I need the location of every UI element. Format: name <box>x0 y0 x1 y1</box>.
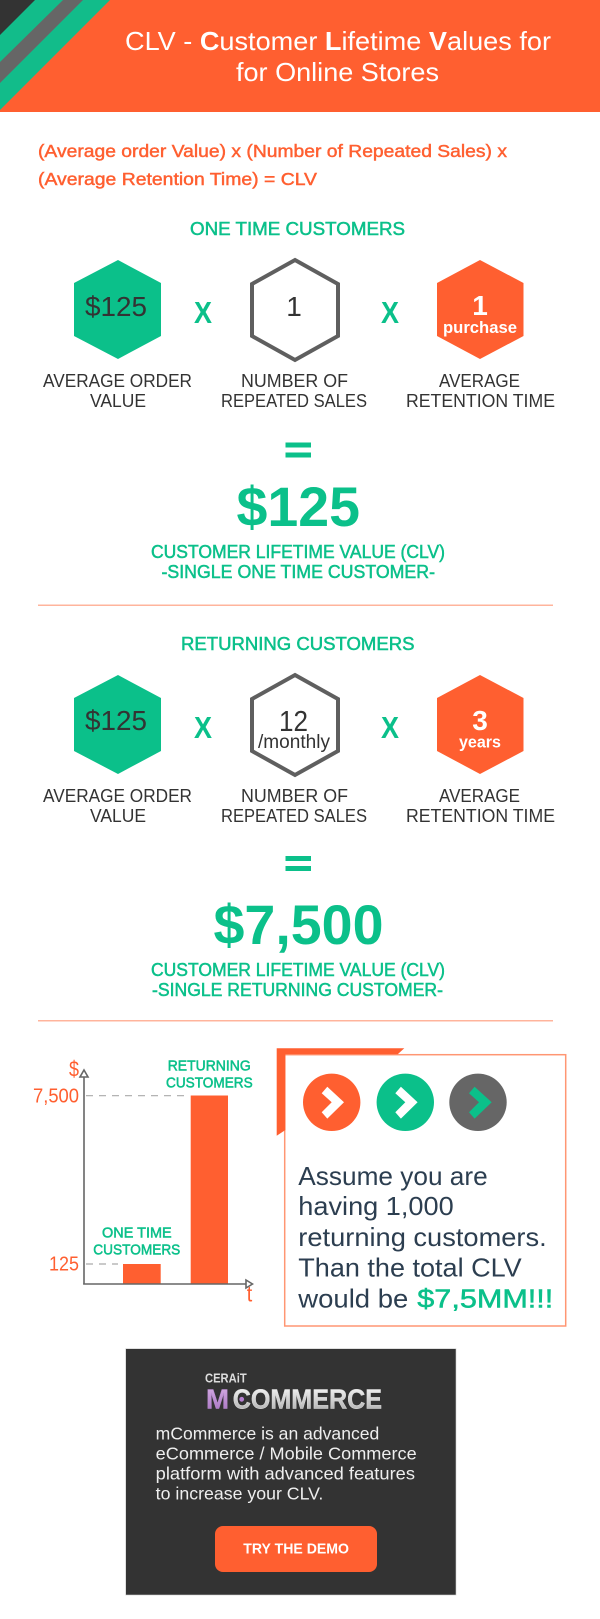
label: number of repeated sales: NUMBER OF <box>241 371 348 391</box>
hexagon: number of repeated sales: 1 <box>286 291 302 322</box>
logo: cerait mcommerce: COMMERCE <box>233 1383 382 1414</box>
callout text: returning customers. <box>298 1222 547 1252</box>
label: average order value <box>43 371 192 411</box>
label: average order value: AVERAGE ORDER <box>43 786 192 806</box>
multiply sign: X <box>194 710 212 745</box>
promo text <box>156 1423 417 1503</box>
promo text: to increase your CLV. <box>156 1483 323 1503</box>
callout text: having 1,000 <box>298 1191 454 1221</box>
button: try the demo: TRY THE DEMO <box>243 1540 349 1557</box>
label: average retention time: RETENTION TIME <box>406 806 555 826</box>
icon: orange chevron circle <box>303 1074 360 1131</box>
promo text: mCommerce is an advanced <box>156 1423 379 1443</box>
callout text <box>297 1161 553 1313</box>
hexagon: number of repeated sales <box>252 675 338 775</box>
result caption: -SINGLE ONE TIME CUSTOMER- <box>162 562 435 582</box>
hexagon: average retention time: years <box>459 732 501 752</box>
label: average retention time <box>406 786 555 826</box>
bar label: one time customers <box>93 1226 180 1258</box>
hexagon: average order value: $125 <box>85 705 147 736</box>
bars <box>123 1096 228 1284</box>
label: average order value: AVERAGE ORDER <box>43 371 192 391</box>
title: for Online Stores <box>236 57 439 87</box>
section heading: RETURNING CUSTOMERS <box>181 634 414 654</box>
formula text: (Average order Value) x (Number of Repeated Sales) x <box>38 141 507 161</box>
label: number of repeated sales: REPEATED SALES <box>221 806 367 826</box>
bar label: returning customers <box>166 1059 253 1091</box>
logo: cerait mcommerce: CERAiT <box>205 1370 247 1385</box>
hexagon: average retention time: purchase <box>443 318 517 337</box>
title: CLV - Customer Lifetime Values for <box>125 26 551 56</box>
label: average retention time <box>406 371 555 411</box>
button: try the demo <box>215 1526 377 1572</box>
label: average order value: VALUE <box>90 391 146 411</box>
promo text: platform with advanced features <box>156 1463 415 1483</box>
label: average retention time: AVERAGE <box>439 371 520 391</box>
callout text: Than the total CLV <box>298 1253 522 1283</box>
decorative diagonal stripes <box>0 0 110 110</box>
label: number of repeated sales <box>221 371 367 411</box>
hexagon: average retention time <box>437 675 524 774</box>
hexagon: number of repeated sales <box>252 260 338 360</box>
hexagon: average retention time <box>437 260 524 359</box>
label: average retention time: RETENTION TIME <box>406 391 555 411</box>
label: average retention time: AVERAGE <box>439 786 520 806</box>
result value: $7,500 <box>214 893 384 956</box>
equals sign <box>286 856 311 871</box>
hexagon: average retention time: 1 <box>472 290 488 321</box>
hexagon: average retention time: 3 <box>472 705 488 736</box>
callout text: $7,5MM!!! <box>417 1283 553 1313</box>
hexagon: average order value <box>74 675 161 774</box>
section: one time customers <box>43 219 555 582</box>
hexagon: average order value: $125 <box>85 291 147 322</box>
formula text <box>38 141 507 189</box>
formula text: (Average Retention Time) = CLV <box>38 169 317 189</box>
multiply sign: X <box>194 295 212 330</box>
result caption: CUSTOMER LIFETIME VALUE (CLV) <box>151 542 445 562</box>
hexagon: number of repeated sales: /monthly <box>258 732 330 753</box>
axis labels <box>33 1056 252 1307</box>
header banner <box>0 0 600 112</box>
label: average order value: VALUE <box>90 806 146 826</box>
result caption <box>151 542 445 582</box>
axis labels: 7,500 <box>33 1086 79 1108</box>
bar label: returning customers: CUSTOMERS <box>166 1075 253 1091</box>
callout panel <box>277 1048 566 1326</box>
axis labels: t <box>247 1282 252 1307</box>
axis labels: 125 <box>49 1254 79 1276</box>
equals sign <box>286 442 311 458</box>
hexagon: number of repeated sales: 12 <box>279 706 308 738</box>
result caption: -SINGLE RETURNING CUSTOMER- <box>152 980 443 1000</box>
hexagon: average order value <box>74 260 161 359</box>
logo: cerait mcommerce <box>205 1370 382 1414</box>
bar label: one time customers: CUSTOMERS <box>93 1242 180 1258</box>
callout text: Assume you are <box>298 1161 488 1191</box>
label: average order value <box>43 786 192 826</box>
multiply sign: X <box>381 295 399 330</box>
axis labels: $ <box>69 1056 79 1082</box>
icon: green chevron circle <box>377 1074 434 1131</box>
result caption: CUSTOMER LIFETIME VALUE (CLV) <box>151 960 445 980</box>
label: number of repeated sales: REPEATED SALES <box>221 391 367 411</box>
result value: $125 <box>236 475 360 538</box>
bar label: returning customers: RETURNING <box>168 1059 251 1075</box>
axes <box>80 1070 252 1288</box>
corner ribbon <box>277 1048 404 1136</box>
callout text: would be <box>297 1283 408 1313</box>
icon: grey chevron circle <box>449 1074 507 1131</box>
result caption <box>151 960 445 1000</box>
section heading: ONE TIME CUSTOMERS <box>190 219 405 239</box>
bar label: one time customers: ONE TIME <box>102 1226 172 1242</box>
title <box>125 26 551 87</box>
section: returning customers <box>43 634 555 1000</box>
multiply sign: X <box>381 710 399 745</box>
logo: cerait mcommerce: M <box>206 1383 229 1414</box>
promo panel <box>126 1349 456 1595</box>
promo text: eCommerce / Mobile Commerce <box>156 1443 417 1463</box>
bar chart <box>33 1056 253 1307</box>
label: number of repeated sales <box>221 786 367 826</box>
label: number of repeated sales: NUMBER OF <box>241 786 348 806</box>
